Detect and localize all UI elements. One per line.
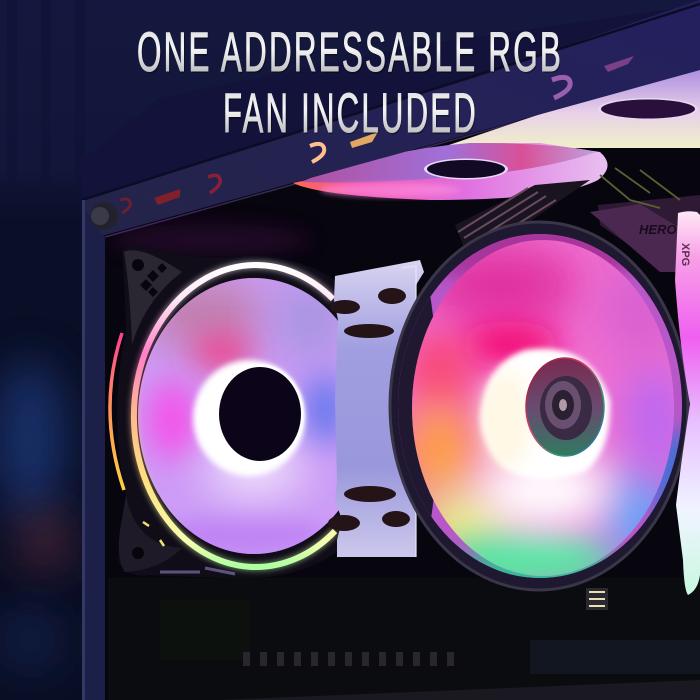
fan frame	[117, 245, 340, 578]
second fan	[448, 70, 700, 148]
XPG logo: XPG	[679, 243, 691, 266]
hub glow	[193, 360, 305, 476]
frame corner bottom	[119, 495, 182, 572]
frame corner top	[124, 250, 182, 345]
fan frame	[390, 222, 688, 590]
right fan	[378, 216, 700, 599]
cables and motherboard label	[455, 168, 700, 272]
fan blades	[412, 240, 674, 576]
hub	[526, 358, 604, 456]
front strip	[82, 0, 700, 240]
CPU cooler heatsink	[328, 260, 424, 557]
RGB ring glow	[134, 265, 335, 567]
HERO label: HERO	[639, 222, 677, 237]
strip tabs	[310, 144, 324, 162]
title shadow: FAN INCLUDED	[224, 83, 479, 146]
hub	[216, 364, 304, 464]
top mounted fans	[293, 60, 700, 200]
outer RGB arc	[110, 333, 124, 490]
interior	[105, 70, 700, 700]
hub glow	[480, 349, 610, 480]
pink blade band	[398, 234, 682, 578]
side pillar	[82, 205, 105, 700]
fan blades	[138, 278, 339, 554]
first fan	[293, 143, 608, 200]
title	[137, 20, 564, 146]
title line two: FAN INCLUDED	[223, 81, 478, 144]
RAM stick on right	[675, 211, 700, 595]
top panel	[82, 5, 700, 205]
motherboard	[108, 578, 700, 700]
left fan	[110, 245, 350, 578]
title shadow	[138, 22, 564, 146]
mounting bits	[160, 568, 235, 574]
screw	[90, 202, 118, 230]
RGB ring	[134, 265, 335, 567]
